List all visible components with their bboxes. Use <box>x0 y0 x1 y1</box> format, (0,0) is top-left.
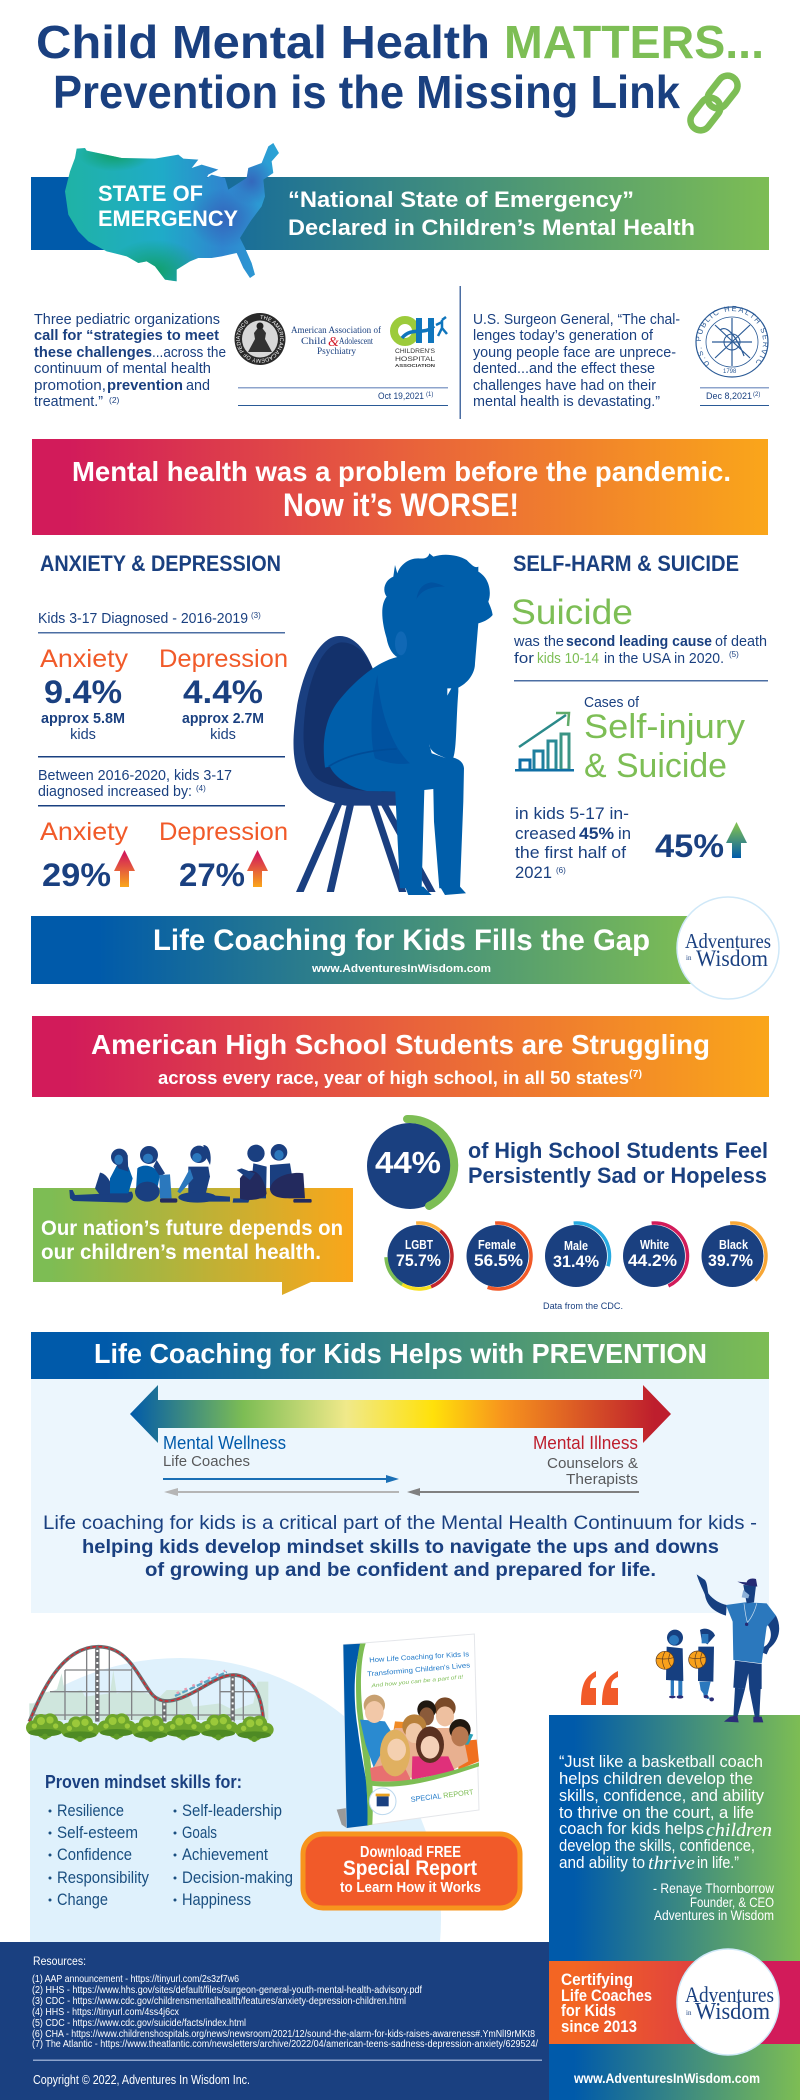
illustration: coach and kids <box>656 1574 779 1722</box>
stat: 44% sad or hopeless: of High School Students Feel <box>468 1138 768 1163</box>
quote text: develop the skills, confidence, <box>559 1837 755 1855</box>
continuum description: Life coaching for kids is a critical part of the Mental Health Continuum for kids - <box>43 1512 757 1534</box>
illustration: special report book <box>337 1634 479 1828</box>
stat: Male 31.4%: 31.4% <box>553 1252 599 1271</box>
suicide fact <box>511 593 767 667</box>
quote text: thrive <box>648 1853 695 1874</box>
quote attribution: Founder, & CEO <box>690 1894 774 1910</box>
text: surgeon general: dented...and the effect these <box>473 360 655 377</box>
label: mental wellness: Life Coaches <box>163 1453 250 1470</box>
resources list: (5) CDC - https://www.cdc.gov/suicide/facts/index.html <box>32 2018 246 2029</box>
date line: October: Oct 19,2021 <box>378 391 424 402</box>
suicide fact: of death <box>715 633 767 650</box>
self-injury description: 45% <box>579 825 614 843</box>
column one: Responsibility <box>57 1868 149 1887</box>
stat: depression 27%: 27% <box>179 857 245 893</box>
logo: Adventures in Wisdom: Adventures <box>685 1982 774 2007</box>
column two: Happiness <box>182 1890 251 1909</box>
text: pediatric organizations: treatment.” <box>34 393 103 410</box>
icon: quotation mark <box>581 1671 618 1705</box>
banner: life coaching fills the gap: www.AdventuresInWisdom.com <box>311 963 491 975</box>
orange certifying band <box>549 1961 800 2044</box>
quote text: to thrive on the court, a life <box>559 1804 754 1822</box>
stat: Male 31.4%: Male <box>564 1239 588 1253</box>
orange certifying band: Life Coaches <box>561 1987 652 2005</box>
logo: Adventures in Wisdom: in <box>686 954 692 962</box>
stat: Female 56.5%: Female <box>478 1238 516 1252</box>
subheading: diagnosed: Kids 3-17 Diagnosed - 2016-2019 <box>38 611 248 627</box>
suicide fact: second leading cause <box>566 633 712 650</box>
button: download special report: Special Report <box>343 1857 477 1880</box>
stat: depression 27%: Depression <box>159 818 288 846</box>
text: surgeon general: young people face are unprece- <box>473 344 676 361</box>
quote text: and ability to <box>559 1854 645 1872</box>
banner heading: Declared in Children’s Mental Health <box>288 215 695 240</box>
stat: anxiety 29% <box>40 818 135 893</box>
continuum description <box>43 1512 757 1581</box>
banner: high school students: across every race, year of high school, in all 50 states <box>158 1068 629 1088</box>
stat: 45% up <box>655 822 747 864</box>
icon: rising bar chart <box>515 713 574 772</box>
logo: Adventures in Wisdom <box>677 897 779 999</box>
logo: Children's Hospital Association: CHILDREN'S <box>395 348 436 355</box>
banner: high school students: (7) <box>629 1069 642 1080</box>
subheading: diagnosed: (3) <box>251 611 261 620</box>
date line: December <box>700 387 769 406</box>
heading: ANXIETY & DEPRESSION <box>40 551 281 576</box>
button: download special report: to Learn How it Works <box>340 1879 481 1896</box>
resources heading: Resources: <box>33 1956 86 1968</box>
quote text: coach for kids helps <box>559 1820 704 1838</box>
quote attribution: Adventures in Wisdom <box>654 1907 774 1923</box>
stat: depression 27% <box>159 818 288 893</box>
column two <box>174 1801 293 1909</box>
arrow: coaches forward <box>163 1475 399 1483</box>
self-injury description: 2021 <box>515 864 552 882</box>
stat: White 44.2%: White <box>640 1238 669 1252</box>
list: proven mindset skills <box>45 1772 293 1909</box>
orange certifying band: for Kids <box>561 2002 616 2020</box>
logo: Adventures in Wisdom: Wisdom <box>696 946 768 971</box>
callout: nation's future <box>33 1188 353 1295</box>
map label: STATE OF <box>98 181 203 206</box>
stat: depression 4.4%: Depression <box>159 645 288 673</box>
logo: AACAP: & <box>328 335 339 350</box>
date line: December: (2) <box>753 392 760 398</box>
logo: AACAP: American Association of <box>291 325 381 335</box>
self-injury heading <box>584 695 745 785</box>
text: surgeon general: U.S. Surgeon General, “The chal- <box>473 311 680 328</box>
suicide fact: (5) <box>729 650 739 659</box>
stat: anxiety 9.4% <box>40 645 129 743</box>
panel: anxiety and depression <box>38 551 288 893</box>
title: MATTERS... <box>504 16 764 68</box>
quote text: skills, confidence, and ability <box>559 1787 765 1805</box>
label: mental illness <box>533 1433 638 1488</box>
banner: before the pandemic <box>32 439 768 535</box>
button: download special report <box>303 1834 520 1908</box>
resources list: (3) CDC - https://www.cdc.gov/childrensmentalhealth/features/anxiety-depression-children.html <box>32 1996 406 2007</box>
logo: AACAP: Child <box>301 336 327 346</box>
column one: Change <box>57 1890 108 1909</box>
source note: Data from the CDC. <box>543 1301 623 1312</box>
title <box>36 16 764 118</box>
logo: US Public Health Service seal: 1798 <box>723 369 737 375</box>
text: pediatric organizations: prevention <box>107 377 183 394</box>
orange certifying band: since 2013 <box>561 2018 637 2036</box>
stat: anxiety 9.4%: 9.4% <box>44 674 122 710</box>
stat: LGBT 75.7% <box>383 1220 455 1292</box>
column one: Resilience <box>57 1801 124 1820</box>
column one <box>48 1801 149 1909</box>
book title: Transforming Children's Lives <box>367 1662 471 1678</box>
continuum description: helping kids develop mindset skills to navigate the ups and downs <box>82 1536 719 1558</box>
stat: depression 4.4% <box>159 645 288 743</box>
callout: nation's future: Our nation’s future depends on <box>41 1217 343 1240</box>
label: mental illness: Therapists <box>566 1471 638 1488</box>
column two: Self-leadership <box>182 1801 282 1820</box>
logo: Adventures in Wisdom <box>677 1949 779 2055</box>
label: mental wellness: Mental Wellness <box>163 1433 286 1453</box>
label: mental wellness <box>163 1433 286 1470</box>
self-injury description: (6) <box>556 866 566 875</box>
book photo: group of kids <box>360 1695 479 1781</box>
banner heading: “National State of Emergency” <box>288 187 634 212</box>
quote text: “Just like a basketball coach <box>559 1753 763 1771</box>
quote text: in life.” <box>697 1854 739 1872</box>
quote text <box>559 1753 772 1874</box>
text: pediatric organizations: Three pediatric organizations <box>34 311 220 328</box>
stat: Black 39.7% <box>697 1220 769 1292</box>
subheading: increase: Between 2016-2020, kids 3-17 <box>38 768 232 784</box>
book title <box>367 1651 471 1689</box>
text: pediatric organizations: continuum of mental health <box>34 360 211 377</box>
subheading: increase: diagnosed increased by: <box>38 784 192 800</box>
logo: Adventures in Wisdom: Adventures <box>685 929 771 953</box>
text: pediatric organizations: and <box>186 377 210 394</box>
text: surgeon general: mental health is devastating.” <box>473 393 660 410</box>
text: pediatric organizations: ...across the <box>152 344 226 361</box>
stat: 44% sad or hopeless <box>367 1119 768 1209</box>
text: surgeon general: challenges have had on their <box>473 377 656 394</box>
date line: October: (1) <box>426 392 433 398</box>
stat: White 44.2% <box>619 1220 690 1292</box>
map label <box>98 181 238 231</box>
text: pediatric organizations: promotion, <box>34 377 106 394</box>
stat: depression 4.4%: 4.4% <box>183 674 263 710</box>
text: surgeon general: lenges today’s generation of <box>473 327 654 344</box>
date line: December: Dec 8,2021 <box>706 391 752 402</box>
suicide fact: in the USA in 2020. <box>604 650 724 667</box>
stat: Female 56.5%: 56.5% <box>474 1251 523 1270</box>
text: pediatric organizations <box>34 311 226 410</box>
stat: Female 56.5% <box>462 1220 534 1292</box>
logo: AACAP: Psychiatry <box>317 346 357 356</box>
stat: LGBT 75.7%: 75.7% <box>396 1251 441 1270</box>
self-injury description: creased <box>515 825 576 843</box>
banner: before the pandemic: Now it’s WORSE! <box>283 487 519 523</box>
orange certifying band: Certifying <box>561 1971 633 1989</box>
panel: life coaching helps with prevention <box>31 1332 769 1613</box>
stat: Black 39.7%: 39.7% <box>708 1251 753 1270</box>
arrow: coaches back <box>164 1488 399 1496</box>
copyright: Copyright © 2022, Adventures In Wisdom Inc. <box>33 2072 250 2087</box>
suicide fact: Suicide <box>511 593 633 632</box>
resources list: (7) The Atlantic - https://www.theatlantic.com/newsletters/archive/2022/04/american-teens-sadness-depression-anxiety/629524/ <box>32 2039 538 2050</box>
logo: AAP seal: THE AMERICAN ACADEMY OF PEDIATRICS <box>236 315 284 363</box>
heading banner: Life Coaching for Kids Helps with PREVENTION <box>94 1338 707 1369</box>
date line: October <box>238 387 448 406</box>
logo: Children's Hospital Association: HOSPITAL <box>395 356 435 363</box>
self-injury description <box>515 805 631 882</box>
stat: anxiety 9.4%: kids <box>70 727 96 743</box>
illustration: sad child on chair <box>293 553 493 895</box>
subheading: increase <box>38 768 232 800</box>
quote attribution: - Renaye Thornborrow <box>653 1880 775 1896</box>
book footer: SPECIAL REPORT <box>410 1787 474 1804</box>
self-injury heading: & Suicide <box>584 747 727 785</box>
banner: state of emergency <box>31 143 769 282</box>
arrow: therapists back <box>407 1488 639 1496</box>
blue background circle <box>30 1658 441 1942</box>
map of USA <box>65 143 279 282</box>
quote text: helps children develop the <box>559 1770 753 1788</box>
stat: 44% sad or hopeless: Persistently Sad or Hopeless <box>468 1163 767 1188</box>
column two: Decision-making <box>182 1868 293 1887</box>
map label: EMERGENCY <box>98 206 238 231</box>
book title: And how you can be a part of it! <box>370 1674 464 1689</box>
list heading: Proven mindset skills for: <box>45 1772 242 1792</box>
footer: resources <box>0 1942 549 2100</box>
self-injury heading: Cases of <box>584 695 640 711</box>
banner: life coaching fills the gap <box>31 897 779 999</box>
stat: anxiety 9.4%: Anxiety <box>40 645 129 673</box>
self-injury heading: Self-injury <box>584 708 745 746</box>
logo: Children's Hospital Association <box>394 317 447 368</box>
text: pediatric organizations: (2) <box>109 395 120 405</box>
stat: depression 4.4%: approx 2.7M <box>182 711 264 727</box>
self-injury description: the first half of <box>515 844 626 862</box>
subheading: increase: (4) <box>196 784 206 793</box>
stat: 44% sad or hopeless: 44% <box>375 1145 441 1180</box>
text: pediatric organizations: these challenges <box>34 344 152 361</box>
continuum description: of growing up and be confident and prepared for life. <box>145 1559 656 1581</box>
suicide fact: was the <box>513 633 564 650</box>
stat: depression 4.4%: kids <box>210 727 236 743</box>
continuum arrow <box>130 1385 671 1443</box>
self-injury description: in <box>618 825 631 843</box>
stat: LGBT 75.7%: LGBT <box>405 1238 433 1252</box>
stat: White 44.2%: 44.2% <box>628 1251 677 1270</box>
heading banner <box>31 1332 769 1379</box>
logo: AACAP <box>291 325 381 356</box>
banner: life coaching fills the gap: Life Coaching for Kids Fills the Gap <box>153 924 650 957</box>
website url: www.AdventuresInWisdom.com <box>573 2071 760 2086</box>
column two: Achievement <box>182 1845 268 1864</box>
suicide fact: for <box>514 650 534 667</box>
stat: Male 31.4% <box>541 1220 612 1292</box>
illustration: sitting kids <box>69 1144 312 1203</box>
panel: self-harm and suicide <box>511 551 768 882</box>
resources list: (1) AAP announcement - https://tinyurl.com/2s3zf7w6 <box>32 1974 239 1985</box>
icon: chain link <box>686 72 742 134</box>
label: mental illness: Counselors & <box>547 1455 638 1472</box>
resources list: (6) CHA - https://www.childrenshospitals.org/news/newsroom/2021/12/sound-the-alarm-for-kids-raises-awareness#.YmNlI9rMKt8 <box>32 2029 535 2040</box>
stat: 45% up: 45% <box>655 828 724 864</box>
stat: anxiety 29%: Anxiety <box>40 818 129 846</box>
button: download special report: Download FREE <box>360 1844 461 1861</box>
resources list: (4) HHS - https://tinyurl.com/4ss4j6cx <box>32 2007 179 2018</box>
stat: anxiety 9.4%: approx 5.8M <box>41 711 125 727</box>
title: Child Mental Health <box>36 16 490 68</box>
suicide fact: kids 10-14 <box>537 650 599 667</box>
logo: Adventures in Wisdom: Wisdom <box>695 1999 770 2025</box>
self-injury description: in kids 5-17 in- <box>515 805 629 823</box>
text: surgeon general <box>473 311 680 410</box>
banner: high school students <box>32 1016 769 1097</box>
column one: Confidence <box>57 1845 132 1864</box>
book footer <box>369 1787 474 1815</box>
banner: high school students: American High School Students are Struggling <box>91 1029 710 1060</box>
logo: AACAP: Adolescent <box>339 336 373 346</box>
banner: before the pandemic: Mental health was a problem before the pandemic. <box>72 456 731 487</box>
logo: Adventures in Wisdom: in <box>686 2009 692 2017</box>
title: Prevention is the Missing Link <box>53 66 680 118</box>
illustration: roller coaster <box>26 1647 274 1742</box>
label: mental illness: Mental Illness <box>533 1433 638 1453</box>
stat: Black 39.7%: Black <box>719 1238 748 1252</box>
banner heading <box>288 187 695 240</box>
book title: How Life Coaching for Kids Is <box>369 1651 470 1664</box>
quote text: children <box>706 1820 772 1841</box>
text: pediatric organizations: call for “strategies to meet <box>34 327 219 344</box>
resources list <box>32 1974 538 2050</box>
resources list: (2) HHS - https://www.hhs.gov/sites/default/files/surgeon-general-youth-mental-health-advisory.pdf <box>32 1985 422 1996</box>
logo: Children's Hospital Association: ASSOCIATION <box>395 363 435 368</box>
panel: founder quote <box>549 1715 800 2100</box>
callout: nation's future: our children’s mental health. <box>41 1241 321 1264</box>
column two: Goals <box>182 1823 217 1842</box>
logo: US Public Health Service seal <box>695 306 769 378</box>
logo: US Public Health Service seal: U.S. PUBLIC HEALTH SERVICE <box>696 306 768 367</box>
column one: Self-esteem <box>57 1823 138 1842</box>
quote attribution <box>653 1880 775 1923</box>
stat: anxiety 29%: 29% <box>42 857 111 893</box>
heading: SELF-HARM & SUICIDE <box>513 551 739 576</box>
